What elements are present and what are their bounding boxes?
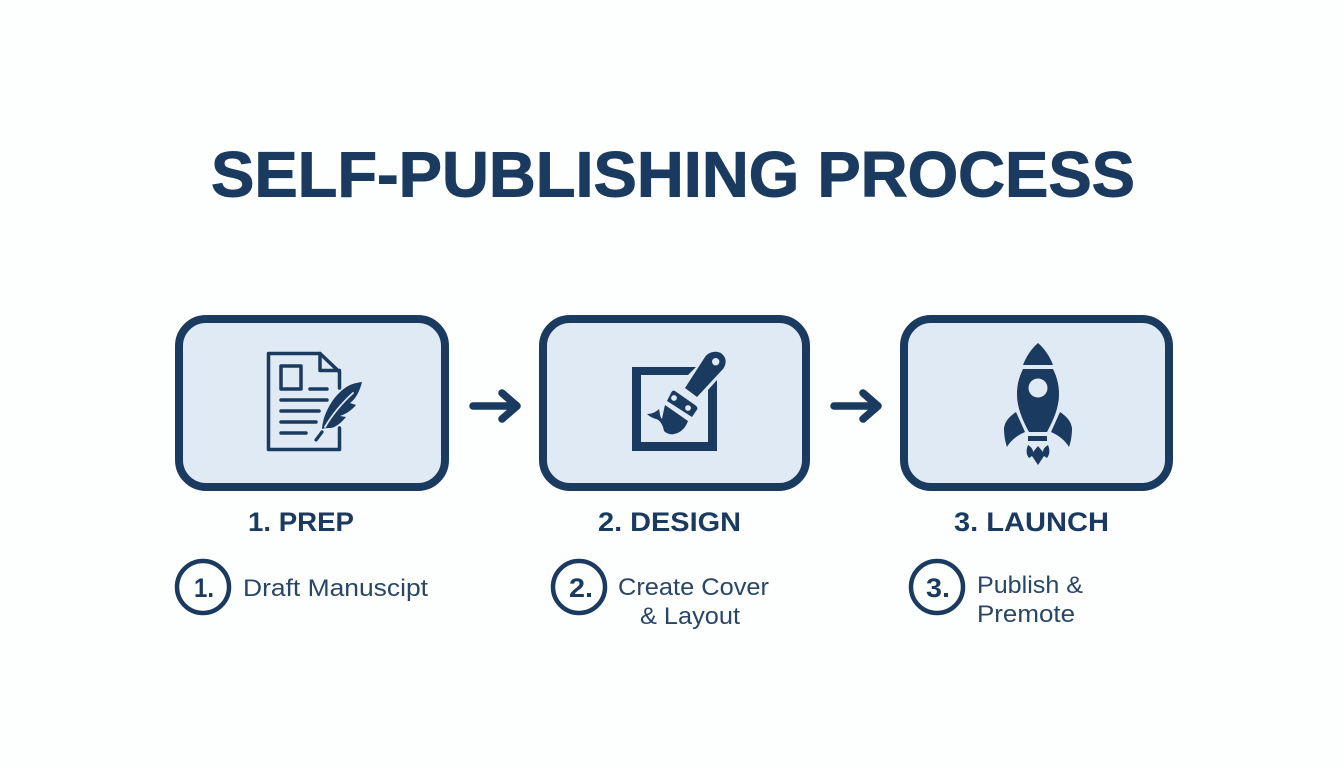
number badge 1: [177, 561, 229, 613]
arrow: prep to design: [473, 393, 517, 419]
number badge 1: 1.: [194, 573, 214, 603]
number badge 2: 2.: [569, 573, 593, 603]
text: create cover and layout: [618, 574, 769, 630]
heading: 1. PREP: 1. PREP: [248, 507, 354, 537]
number badge 3: [911, 561, 963, 613]
icon: paintbrush over frame: [632, 352, 726, 451]
panel box: prep: [179, 319, 445, 487]
heading: 3. LAUNCH: 3. LAUNCH: [954, 507, 1109, 537]
text: publish and premote: Publish &: [977, 572, 1083, 599]
panel box: design: [543, 319, 806, 487]
arrow: design to launch: [834, 393, 878, 419]
heading: 2. DESIGN: 2. DESIGN: [598, 507, 741, 537]
icon: rocket: [1004, 343, 1072, 465]
panel: step 2 design: [543, 319, 806, 487]
text: create cover and layout: Create Cover: [618, 574, 769, 601]
text: publish and premote: Premote: [977, 601, 1075, 628]
number badge 2: [553, 561, 605, 613]
number badge 3: 3.: [926, 573, 950, 603]
text: draft manuscipt: Draft Manuscipt: [243, 575, 428, 602]
panel box: launch: [904, 319, 1169, 487]
title: SELF-PUBLISHING PROCESS: [211, 138, 1135, 210]
text: publish and premote: [977, 572, 1083, 628]
step item: create cover and layout: [553, 561, 769, 630]
step item: draft manuscript: [177, 561, 428, 613]
step item: publish and premote: [911, 561, 1083, 628]
panel: step 1 prep: [179, 319, 445, 487]
icon: document with quill: [268, 354, 362, 450]
panel: step 3 launch: [904, 319, 1169, 487]
text: create cover and layout: & Layout: [640, 603, 740, 630]
